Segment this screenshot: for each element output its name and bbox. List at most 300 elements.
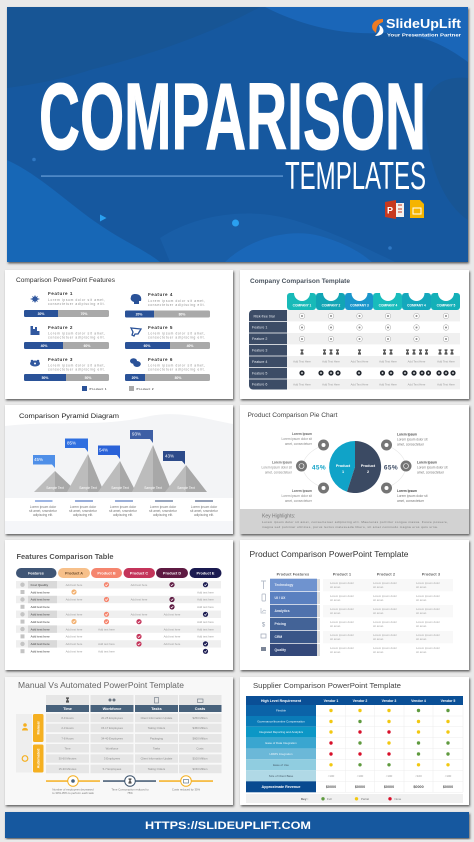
product text cells: Lorem ipsum dolor [330,646,354,650]
header row: Vendor 4 [411,699,426,703]
heading: Product Comparison Pie Chart [248,412,338,419]
header pills: Product B [97,571,116,575]
product text cells: Lorem ipsum dolor [416,633,440,637]
table cells: 5-7 Employees [103,767,122,771]
feature 3 [24,357,109,381]
column text: Lorem ipsum dolor [110,505,137,509]
product text cells: sit amet. [416,611,427,615]
row icons: $ [262,622,266,628]
outcome: time [103,776,156,795]
header row: Vendor 2 [353,699,367,703]
callout 45% [33,455,55,468]
footer url band: HTTPS://SLIDEUPLIFT.COM [145,820,311,832]
feature 1: 70% [81,312,87,316]
feature 4: 80% [179,312,185,316]
company header [287,285,460,310]
panel: company comparison [240,270,469,399]
add text row 4: Add Text Here [379,360,397,364]
table cells: $450 Million [193,726,208,730]
product text cells [330,581,440,654]
feature 3: Feature 3 [48,357,73,362]
product text cells: Lorem ipsum dolor [330,581,354,585]
outcome: workforce: Number of employees decreased [52,788,94,792]
product text cells: sit amet. [373,611,384,615]
requirement column: Ease of Data Integration [265,741,297,745]
column text: sit amet, snsectetur [69,509,98,513]
feature 3: consectetuer adipiscing elit. [48,368,105,372]
callout 54% [98,446,120,459]
requirement column: Integrated Reporting and Analytics [259,730,304,734]
requirement column [246,705,316,792]
feature 5 [125,325,210,349]
right labels: amet, consectetuer [397,442,425,446]
table cells: Costs [196,746,204,750]
column headers: Product Features [277,572,309,576]
left labels [262,432,313,503]
table text cells: Add text here [197,605,214,609]
outcome: time: Time Consumption reduced to [111,788,149,792]
feature column: Feature 3 [252,348,267,352]
feature 6: 80% [175,376,181,380]
left labels: Lorem ipsum dolor sit [282,437,312,441]
company header: COMPANY 2 [322,304,341,308]
right labels: Lorem Ipsum [417,460,437,464]
table text cells: Add text here [197,598,214,602]
feature bars: Analytics [274,609,290,613]
panel: manual vs automated [5,677,233,805]
key highlights: Key Highlights: [262,514,295,520]
product text cells: sit amet. [330,637,341,641]
pyramids: Sample Text [111,486,129,490]
table cells: 20-25 Employees [101,716,123,720]
panel: product comparison [240,540,469,670]
feature bars: Pricing [274,622,286,626]
feature bars: UI / UX [274,596,286,600]
icon: PowerPoint [385,200,404,219]
column text: adipiscing elit. [113,513,133,517]
callout 85%: 85% [67,440,76,446]
feature bars: CRM [274,635,282,639]
panel: pyramid diagram [5,405,233,534]
column headers: Product 3 [422,572,440,576]
client base values: <100 [357,774,364,778]
client base values: <100 [328,774,335,778]
column text: Lorem ipsum dolor [30,505,57,509]
feature 4: Feature 4 [148,292,173,297]
revenue values: $0000 [355,785,365,789]
product text cells: Lorem ipsum dolor [416,594,440,598]
left labels: amet, consectetuer [265,470,293,474]
row tabs: Automated [36,748,40,768]
table cells: Tasks [153,746,161,750]
logo tagline: Your Presentation Partner [387,32,461,38]
add text row 6: Add Text Here [293,382,311,386]
left labels: Lorem ipsum dolor sit [262,466,292,470]
table text cells: Add text here [197,635,214,639]
table text cells: Add text here [98,627,115,631]
add text row 6 [293,382,455,386]
logo wordmark: SlideUpLift [386,16,462,31]
legend: Product 1 [90,387,107,391]
table cells: $250 Million [193,716,208,720]
table cells: 8-9 Hours [61,716,74,720]
feature 2: consectetuer adipiscing elit. [48,336,105,340]
product text cells: sit amet. [330,650,341,654]
table cells: $150 Million [193,767,208,771]
company header: COMPANY 1 [293,304,312,308]
logo [372,16,462,36]
requirement column: Size of Client Base [269,774,294,778]
feature names [20,581,57,654]
company header: COMPANY 4 [379,304,398,308]
column text: sit amet, snsectetur [109,509,138,513]
feature bars [270,579,320,656]
feature names: Add text here [30,605,50,609]
header row: High Level Requirement [261,699,302,703]
right labels: Lorem ipsum dolor sit [397,494,428,498]
product text cells: Lorem ipsum dolor [373,633,397,637]
product text cells: Lorem ipsum dolor [373,646,397,650]
add text row 6: Add Text Here [351,382,369,386]
product text cells: sit amet. [416,585,427,589]
feature column: Feature 4 [252,360,267,364]
right labels: Lorem ipsum dolor sit [397,438,428,442]
heading: Features Comparison Table [16,554,114,561]
column headers: Time [63,707,72,711]
client base values [328,774,452,778]
header row: Vendor 1 [324,699,338,703]
feature names: Add text here [30,598,50,602]
feature names: Add text here [30,650,50,654]
feature 2: 60% [84,344,90,348]
left labels: amet, consectetuer [285,499,313,503]
callout 93% [130,430,153,443]
feature names: Cost Quality [30,583,49,587]
outcome: costs [159,776,213,792]
value 65%: 65% [384,464,398,472]
product text cells: Lorem ipsum dolor [330,620,354,624]
feature column: Risk-free trial [254,314,275,318]
right labels: Lorem ipsum dolor sit [417,466,448,470]
rating dots [329,709,450,766]
left labels: amet, consectetuer [285,442,313,446]
column text: adipiscing elit. [33,513,53,517]
company header: COMPANY 5 [437,304,456,308]
product text cells: Lorem ipsum dolor [330,594,354,598]
heading: Comparison PowerPoint Features [16,277,116,284]
column text: Lorem ipsum dolor [191,505,218,509]
product text cells: Lorem ipsum dolor [373,581,397,585]
grid lines [316,705,463,792]
hero background waves [7,7,468,262]
outcome: time: 75% [127,791,133,795]
dollar ratings [299,370,456,376]
icon: Google Slides [410,200,424,218]
table cells: 3 Employees [104,757,121,761]
product text cells: sit amet. [330,585,341,589]
add text row 4: Add Text Here [351,360,369,364]
column text: Lorem ipsum dolor [70,505,97,509]
callout 85% [65,438,88,452]
table cells: $100 Million [193,757,208,761]
value 45%: 45% [312,464,326,472]
feature 2: Feature 2 [48,325,73,330]
legend: Product 2 [136,387,154,391]
client base values: <100 [445,774,452,778]
column headers [46,695,222,712]
product text cells: sit amet. [416,624,427,628]
right labels: Lorem Ipsum [397,432,417,436]
client base values: <100 [386,774,393,778]
column text: sit amet, snsectetur [190,509,219,513]
right labels: Lorem Ipsum [397,489,417,493]
add text row 6: Add Text Here [437,382,455,386]
company header: COMPANY 3 [350,304,369,308]
feature 5: Lorem ipsum dolor sit amet, [148,332,205,336]
product text cells: Lorem ipsum dolor [416,646,440,650]
column text [29,505,219,517]
product text cells: Lorem ipsum dolor [373,594,397,598]
product text cells: sit amet. [416,637,427,641]
column headers: Workforce [103,707,121,711]
hourglass ratings [300,349,454,355]
table text cells: Add text here [164,635,181,639]
panel: supplier comparison [240,677,469,805]
requirement column: Approximate Revenue [262,785,300,789]
feature 6: Lorem ipsum dolor sit amet, [148,364,205,368]
company header: COMPANY 4 [407,304,426,308]
icon nodes [296,440,412,494]
requirement column: Flexible [276,708,286,712]
left labels: Lorem Ipsum [292,432,312,436]
table cells: Packaging [150,736,163,740]
feature 4: Lorem ipsum dolor sit amet, [148,299,205,303]
feature 5: 60% [144,344,150,348]
heading: Product Comparison PowerPoint Template [250,550,409,559]
hero banner [7,7,468,262]
feature 2: 40% [41,344,47,348]
requirement column: HRMS Integration [270,752,293,756]
feature names: Add text here [30,642,50,646]
pyramids: Sample Text [177,486,195,490]
outcome: costs: Costs reduced by 35% [172,788,201,792]
feature column: Feature 2 [252,337,267,341]
key highlights: Lorem ipsum dolor sit amet, consectetuer adipiscing elit. Maecenas porttitor congue massa. Fusce posuere, [262,520,448,524]
table cells: Taking Orders [148,726,166,730]
callout 54%: 54% [99,448,108,452]
header pills: Product A [65,571,83,575]
key highlights: magna sed pulvinar ultricies, purus lectus malesuada libero, sit amet commodo magna eros quis urna. [262,525,438,529]
product text cells: sit amet. [330,611,341,615]
feature 5: 40% [187,344,193,348]
add text row 4 [293,360,455,364]
feature 4: consectetuer adipiscing elit. [148,303,205,307]
legend: Key : [301,797,308,801]
revenue values: $0000 [413,785,424,789]
column text: sit amet, snsectetur [149,509,178,513]
feature names: Add text here [30,590,50,594]
feature 5: Feature 5 [148,325,173,330]
right labels: amet, consectetuer [397,499,425,503]
heading: Company Comparison Template [250,278,350,285]
product text cells: Lorem ipsum dolor [373,620,397,624]
pie chart [329,441,381,493]
column text: adipiscing elit. [153,513,173,517]
left labels: Lorem ipsum dolor sit [282,494,312,498]
feature 1: consectetuer adipiscing elit. [48,302,105,306]
add text row 4: Add Text Here [437,360,455,364]
callout 43%: 43% [165,454,174,458]
revenue values: $0000 [443,785,453,789]
product text cells: Lorem ipsum dolor [416,620,440,624]
feature 1: Lorem ipsum dolor sit amet, [48,298,105,302]
callout 43% [163,451,185,464]
legend: Partial [361,797,369,801]
header pills: Product D [163,571,181,575]
bottom band [5,521,233,534]
feature 6 [125,357,210,381]
feature 3: Lorem ipsum dolor sit amet, [48,364,105,368]
legend [82,386,154,391]
legend: None [394,797,402,801]
icon: PowerPoint: P [387,206,393,216]
outcome: workforce: to 30%-35% to perform each task [52,791,94,795]
requirement column: Ease of Use [273,763,289,767]
pie chart: 1 [342,470,344,474]
product text cells: sit amet. [373,650,384,654]
column text: adipiscing elit. [73,513,93,517]
table text cells: Add text here [197,627,214,631]
table cells: Taking Orders [148,767,166,771]
title rule [41,175,283,178]
add text row 6: Add Text Here [379,382,397,386]
product text cells: sit amet. [330,624,341,628]
table cells: 15-17 Employees [101,726,123,730]
logo mark [372,19,383,36]
table cells: 30-60 Minutes [59,757,77,761]
check marks [299,313,449,342]
table cells: 7-8 Hours [61,736,74,740]
table cells: 34-40 Employees [101,736,123,740]
feature 6: Feature 6 [148,357,173,362]
table stripes [16,581,221,648]
footer url band [5,812,469,838]
table text cells: Add text here [66,612,83,616]
callout 93%: 93% [132,432,141,436]
feature bars: Quality [274,648,286,652]
table text cells: Add text here [131,583,148,587]
product text cells: Lorem ipsum dolor [330,633,354,637]
table text cells: Add text here [66,627,83,631]
feature 5: consectetuer adipiscing elit. [148,336,205,340]
table cells: Workforce [106,746,119,750]
revenue values [326,785,453,789]
pyramids: Sample Text [144,486,162,490]
product text cells: Lorem ipsum dolor [330,607,354,611]
header pills: Product E [197,571,215,575]
header pills: Features [28,571,44,575]
table text cells: Add text here [197,590,214,594]
feature 4 [125,292,210,318]
feature 1 [24,291,109,317]
panel: comparison features [5,270,233,399]
column headers: Tasks [151,707,162,711]
column headers [277,572,440,576]
feature column: Feature 6 [252,382,267,386]
outcome: workforce [46,776,100,795]
table cells [46,714,222,773]
feature 2 [24,325,109,349]
add text row 6: Add Text Here [322,382,340,386]
right labels: amet, consectetuer [417,470,445,474]
feature 2: Lorem ipsum dolor sit amet, [48,332,105,336]
feature 3: 50% [85,376,91,380]
product text cells: Lorem ipsum dolor [373,607,397,611]
column headers: Product 2 [377,572,395,576]
faint dots [32,158,392,250]
product text cells: sit amet. [330,598,341,602]
column headers: Product 1 [333,572,351,576]
product text cells: Lorem ipsum dolor [416,607,440,611]
table checks [71,582,208,654]
column text: sit amet, snsectetur [29,509,58,513]
feature column: Feature 5 [252,372,267,376]
table text cells: Add text here [66,598,83,602]
product text cells: sit amet. [373,637,384,641]
table cells: Time [64,746,71,750]
feature bars: Technology [274,583,293,587]
table text cells: Add text here [131,598,148,602]
feature names: Add text here [30,635,50,639]
feature column: Feature 1 [252,326,267,330]
pie chart: Product [336,464,351,468]
panel: features table [5,540,233,670]
column text: adipiscing elit. [194,513,214,517]
heading: Supplier Comparison PowerPoint Template [253,681,401,690]
row icons [261,581,266,651]
product text cells: Lorem ipsum dolor [416,581,440,585]
feature column [249,310,287,390]
table text cells: Add text here [131,612,148,616]
header pills [16,568,222,578]
table text cells: Add text here [164,642,181,646]
callout 45%: 45% [34,457,43,462]
add text row 4: Add Text Here [322,360,340,364]
product text cells: sit amet. [416,598,427,602]
pyramids: Sample Text [46,486,64,490]
left labels: Lorem Ipsum [272,460,292,464]
table cells: 2-3 Hours [61,726,74,730]
table text cells [66,583,214,654]
product text cells: sit amet. [416,650,427,654]
row stripes [287,310,460,389]
row backgrounds [323,579,453,643]
table text cells: Add text here [66,635,83,639]
header pills: Product C [130,571,148,575]
right labels [397,432,448,503]
revenue values: $0000 [384,785,394,789]
heading: Manual Vs Automated PowerPoint Template [18,681,185,690]
column rules [35,500,213,502]
table text cells: Add text here [66,583,83,587]
table text cells: Add text here [66,650,83,654]
table text cells: Add text here [164,612,181,616]
client base values: <100 [415,774,422,778]
feature names: Add text here [30,627,50,631]
feature 3: 50% [42,376,48,380]
feature 4: 20% [136,312,142,316]
requirement column: Governance/Incentive Compensation [257,719,305,723]
